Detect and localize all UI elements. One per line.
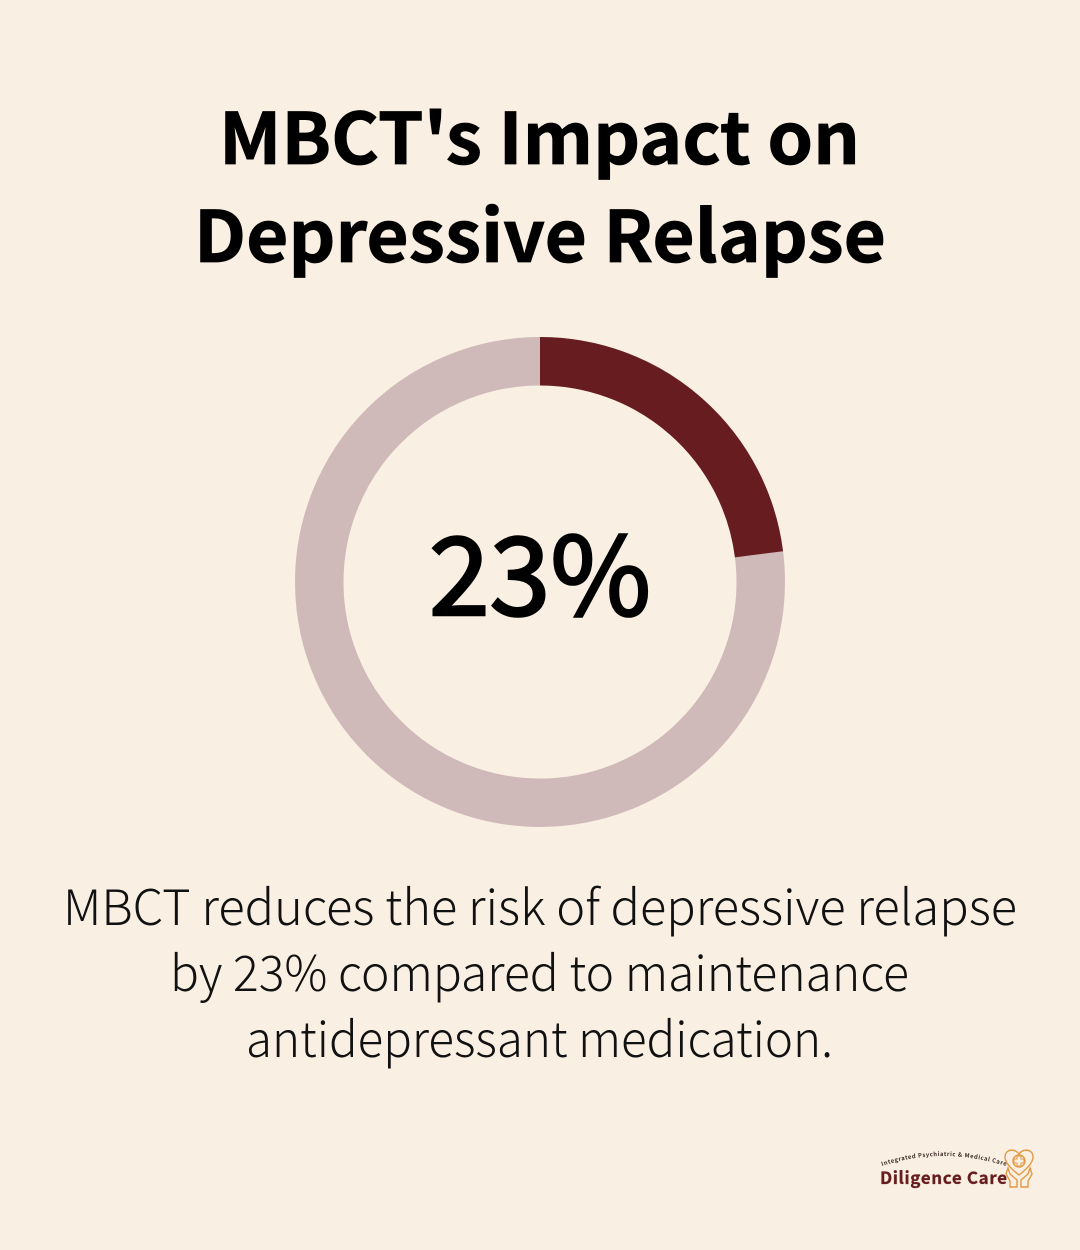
title: Depressive Relapse [194,181,886,283]
title: MBCT's Impact on [219,83,860,185]
logo: Diligence Care [880,1149,1034,1189]
description text: MBCT reduces the risk of depressive relapse [63,869,1017,940]
description text: by 23% compared to maintenance [170,935,909,1006]
title [194,83,886,283]
donut chart: 23% [319,361,761,803]
logo: Diligence Care: Integrated Psychiatric & Medical Care [881,1151,1006,1166]
logo tagline [882,1156,1006,1166]
donut value: 23% [429,491,651,647]
icon: heart and hands [1005,1150,1033,1187]
description text [63,869,1017,1072]
description text: antidepressant medication. [246,1001,833,1072]
logo wordmark: Diligence Care [880,1164,1007,1189]
